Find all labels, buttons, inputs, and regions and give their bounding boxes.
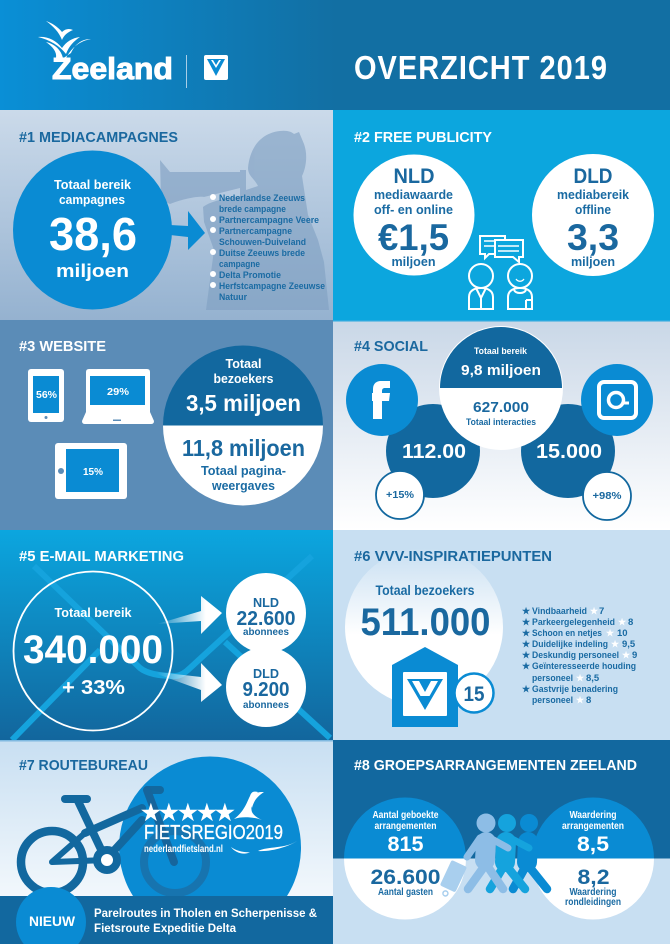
fietsregio logo: FIETSREGIO2019: [144, 822, 283, 844]
bookings circle: Aantal geboekte: [372, 810, 439, 821]
campaign list: Partnercampagne: [219, 226, 292, 236]
rating list: Vindbaarheid: [532, 606, 587, 617]
icon: phone 56%: 56%: [36, 390, 57, 401]
rating list: 8,5: [586, 673, 600, 684]
icon: bicycle: [21, 790, 206, 893]
badge: +15%: +15%: [386, 490, 414, 501]
rating list: ★: [522, 606, 531, 616]
rating list: personeel: [532, 695, 573, 706]
visitors circle: [163, 346, 323, 505]
NIEUW banner: Parelroutes in Tholen en Scherpenisse &: [94, 906, 317, 920]
icon: tablet 15%: [55, 443, 127, 499]
visitors circle: weergaves: [211, 478, 275, 493]
NLD circle: [354, 154, 474, 276]
rating list: ★: [522, 617, 531, 627]
fietsregio logo: ★: [141, 800, 161, 825]
icon: facebook: [346, 364, 418, 436]
rating list: ★: [606, 628, 615, 638]
rating list: 9: [632, 650, 637, 661]
DLD circle: mediabereik: [557, 188, 629, 202]
NLD circle: miljoen: [392, 255, 436, 269]
total reach ring: 340.000: [23, 628, 163, 672]
arrow to DLD: [157, 663, 222, 702]
DLD circle: 9.200: [242, 679, 290, 701]
heading: #4 SOCIAL: [354, 338, 428, 355]
badge: +98%: +98%: [592, 491, 622, 502]
rating list: 10: [617, 628, 628, 639]
rating list: ★: [522, 684, 531, 694]
DLD circle: DLD: [574, 165, 612, 188]
ratings circle: [532, 797, 654, 919]
NIEUW banner: NIEUW: [29, 913, 76, 929]
rating list: Gastvrije benadering: [532, 684, 618, 695]
bookings circle: arrangementen: [374, 821, 436, 832]
heading: #7 ROUTEBUREAU: [19, 757, 148, 774]
total reach ring: + 33%: [62, 677, 125, 699]
NLD circle: off- en online: [374, 203, 453, 217]
NIEUW banner: [0, 887, 333, 944]
DLD circle: 3,3: [567, 217, 619, 258]
panel: #5 e-mail marketing: [0, 530, 333, 740]
NLD circle: €1,5: [378, 217, 449, 258]
NLD circle: 22.600: [236, 608, 296, 630]
arrow to NLD: [157, 596, 222, 634]
rating list: ★: [576, 673, 585, 683]
ratings circle: Waardering: [570, 887, 616, 898]
total reach split circle: Totaal bereik: [474, 346, 528, 356]
panel: #6 VVV-inspiratiepunten: [333, 530, 670, 740]
icon: VVV house: [392, 647, 458, 727]
total reach ring: [14, 572, 172, 730]
total reach split circle: [439, 326, 563, 450]
rating list: Deskundig personeel: [532, 650, 619, 661]
rating list: Duidelijke indeling: [532, 639, 608, 650]
panel: #4 social: [333, 320, 670, 530]
instagram followers circle: 15.000: [536, 441, 602, 463]
rating list: ★: [590, 606, 599, 616]
rating list: ★: [522, 650, 531, 660]
ratings circle: arrangementen: [562, 821, 624, 832]
badge: +15%: [376, 471, 424, 519]
icon: VVV logo: [186, 55, 228, 88]
rating list: Geïnteresseerde houding: [532, 661, 636, 672]
ratings circle: 8,2: [578, 866, 610, 889]
heading: #8 GROEPSARRANGEMENTEN ZEELAND: [354, 757, 637, 774]
bookings circle: [344, 797, 466, 919]
facebook followers circle: 112.00: [402, 441, 466, 463]
rating list: ★: [522, 639, 531, 649]
NLD circle: NLD: [394, 165, 434, 188]
heading: #6 VVV-INSPIRATIEPUNTEN: [354, 548, 552, 565]
rating list: 8: [586, 695, 591, 706]
badge: +98%: [583, 472, 631, 520]
DLD circle: miljoen: [571, 255, 615, 269]
panel: #8 groepsarrangementen: [333, 740, 670, 944]
campaign list: Schouwen-Duiveland: [219, 237, 306, 247]
icon: instagram: [581, 364, 653, 436]
bookings circle: 26.600: [370, 866, 440, 889]
rating list: 7: [599, 606, 604, 617]
campaign list: Natuur: [219, 292, 247, 302]
badge: 15: 15: [464, 683, 485, 706]
visitors total: [360, 582, 490, 644]
NLD circle: NLD: [253, 595, 279, 610]
ratings circle: rondleidingen: [565, 897, 621, 908]
arrow: [170, 211, 205, 250]
DLD circle: [226, 647, 306, 727]
icon: laptop 29%: 29%: [107, 387, 129, 398]
icon: three walking people with suitcase: [437, 814, 547, 899]
DLD circle: abonnees: [243, 700, 289, 711]
heading: #1 MEDIACAMPAGNES: [19, 129, 178, 146]
total reach split circle: 9,8 miljoen: [461, 362, 541, 379]
total reach circle: miljoen: [56, 261, 129, 281]
NLD circle: [226, 573, 306, 653]
rating list: ★: [522, 661, 531, 671]
NIEUW banner: Fietsroute Expeditie Delta: [94, 921, 236, 935]
NLD circle: abonnees: [243, 627, 289, 638]
ratings circle: Waardering: [570, 810, 616, 821]
fietsregio logo: [141, 792, 297, 855]
visitors total: 511.000: [360, 601, 490, 644]
icon: Zeeland birds logo: [38, 21, 91, 59]
visitors circle: bezoekers: [214, 371, 274, 386]
rating list: ★: [522, 628, 531, 638]
campaign list: campagne: [219, 259, 260, 269]
logo wordmark: Zeeland: [52, 51, 173, 86]
icon: phone 56%: [28, 369, 64, 422]
rating list: ★: [576, 695, 585, 705]
total reach circle: campagnes: [59, 192, 125, 207]
panel: #3 website: [0, 320, 333, 530]
icon: tablet 15%: 15%: [83, 467, 103, 478]
total reach circle: Totaal bereik: [54, 177, 132, 192]
visitors circle: Totaal pagina-: [201, 463, 286, 478]
heading: #5 E-MAIL MARKETING: [19, 548, 184, 565]
total reach split circle: 627.000: [473, 399, 529, 416]
icon: person with megaphone silhouette: [160, 131, 329, 310]
rating list: ★: [622, 650, 631, 660]
visitors circle: 11,8 miljoen: [182, 435, 305, 461]
campaign list: [210, 193, 325, 302]
total reach circle: [13, 150, 172, 310]
total reach circle: 38,6: [49, 208, 137, 260]
visitors total: Totaal bezoekers: [376, 582, 475, 598]
campaign list: Duitse Zeeuws brede: [219, 248, 305, 258]
panel: #2 free publicity: [333, 110, 670, 320]
DLD circle: offline: [575, 203, 611, 217]
rating list: ★: [618, 617, 627, 627]
rating list: 8: [628, 617, 633, 628]
bookings circle: Aantal gasten: [378, 887, 433, 898]
bookings circle: 815: [388, 833, 424, 856]
rating list: [522, 606, 637, 706]
campaign list: Partnercampagne Veere: [219, 215, 319, 225]
icon: two people talking: [469, 236, 532, 309]
visitors circle: 3,5 miljoen: [186, 390, 301, 416]
rating list: Schoon en netjes: [532, 628, 602, 639]
fietsregio logo: ★: [178, 800, 198, 825]
title: OVERZICHT 2019: [354, 49, 607, 86]
campaign list: Nederlandse Zeeuws: [219, 193, 305, 203]
facebook followers circle: [386, 404, 480, 498]
fietsregio logo: ★: [215, 800, 235, 825]
total reach ring: Totaal bereik: [54, 605, 132, 620]
panel: #1 mediacampagnes: [0, 110, 333, 320]
campaign list: Delta Promotie: [219, 270, 281, 280]
visitors circle: Totaal: [226, 356, 262, 371]
fietsregio logo: ★: [197, 800, 217, 825]
total reach split circle: Totaal interacties: [466, 417, 536, 427]
campaign list: brede campagne: [219, 204, 286, 214]
instagram followers circle: [521, 404, 615, 498]
ratings circle: 8,5: [577, 833, 609, 856]
fietsregio logo: ★: [159, 800, 179, 825]
DLD circle: [532, 154, 654, 276]
NLD circle: mediawaarde: [374, 188, 453, 202]
rating list: 9,5: [622, 639, 636, 650]
DLD circle: DLD: [253, 666, 279, 681]
heading: #2 FREE PUBLICITY: [354, 129, 492, 146]
rating list: personeel: [532, 673, 573, 684]
rating list: ★: [611, 639, 620, 649]
heading: #3 WEBSITE: [19, 338, 106, 355]
panel: #7 routebureau: [0, 740, 333, 944]
icon: laptop 29%: [82, 369, 154, 424]
header band: [0, 0, 670, 110]
campaign list: Herfstcampagne Zeeuwse: [219, 281, 325, 291]
badge: 15: [454, 674, 494, 712]
rating list: Parkeergelegenheid: [532, 617, 615, 628]
fietsregio logo: nederlandfietsland.nl: [144, 844, 223, 855]
